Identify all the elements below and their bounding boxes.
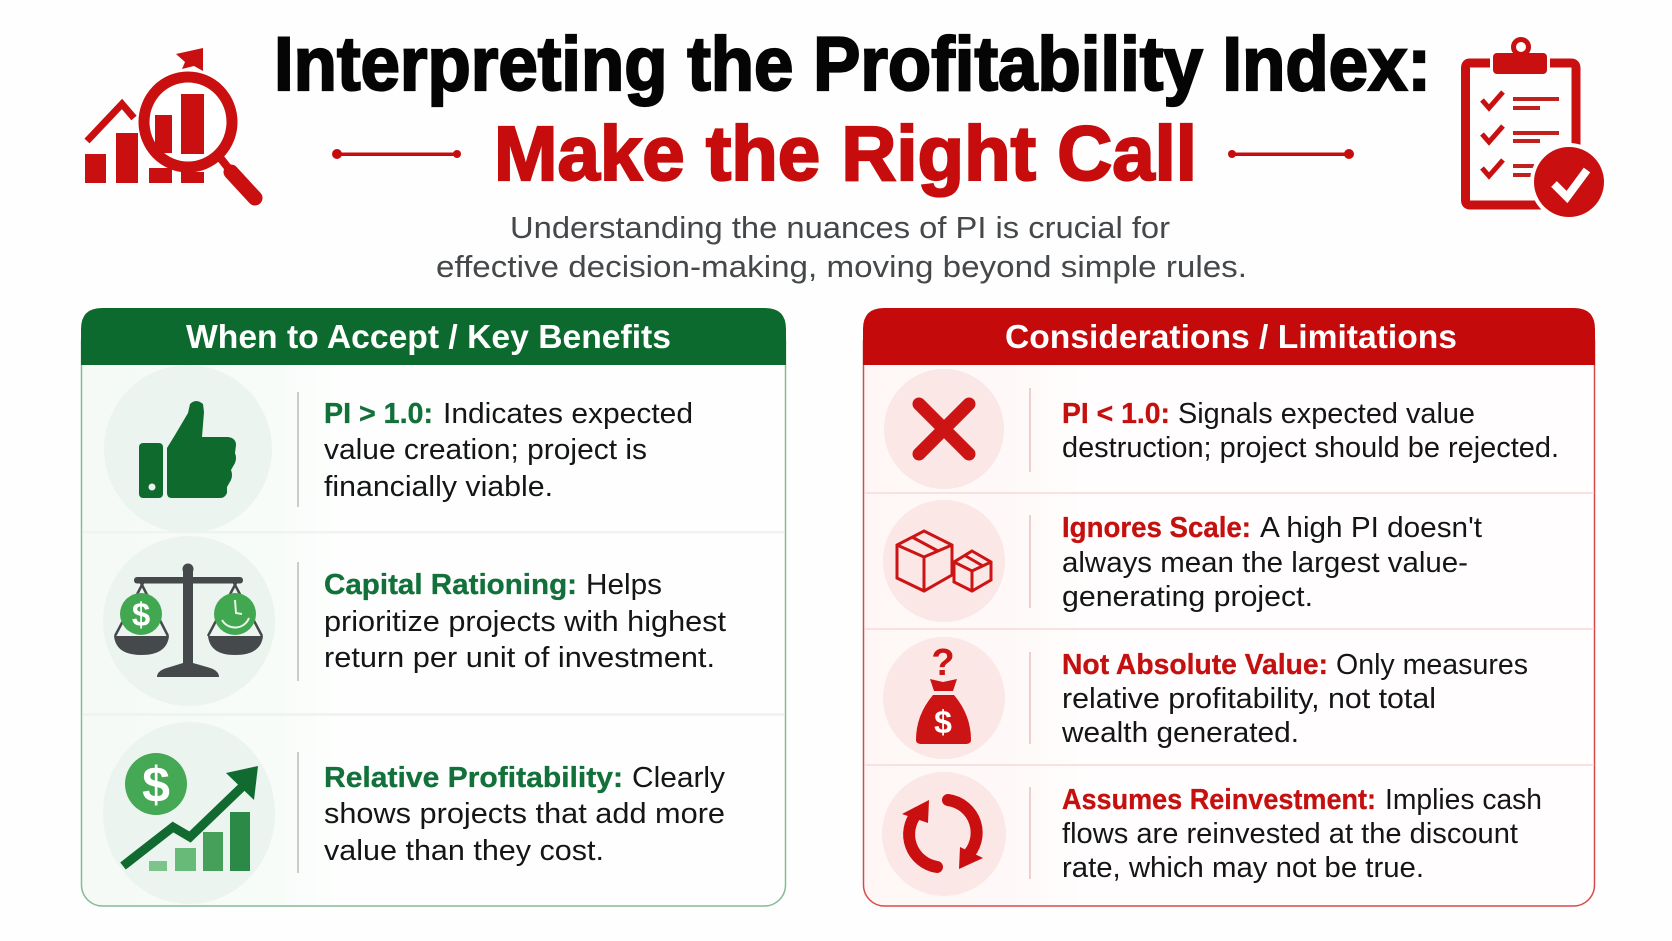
text: relative profitability: Relative Profitability: <box>324 762 623 794</box>
text: not absolute value: relative profitability, not total <box>1062 683 1436 715</box>
red panel header: Considerations / Limitations <box>1005 318 1457 355</box>
icon: two boxes <box>883 500 1005 622</box>
row: PI below 1.0 <box>884 369 1559 489</box>
text: assumes reinvestment: flows are reinvested at the discount <box>1062 818 1518 850</box>
text: PI below 1.0: PI < 1.0: <box>1062 398 1170 430</box>
green panel header <box>81 308 786 365</box>
text: capital rationing <box>324 569 726 674</box>
icon: balance scale: $ <box>132 596 150 633</box>
icon: circular arrows <box>882 772 1006 896</box>
text: PI below 1.0: Signals expected value <box>1178 398 1475 430</box>
text: PI above 1.0 <box>324 398 693 503</box>
text: not absolute value: wealth generated. <box>1061 717 1299 749</box>
red panel header <box>863 308 1595 365</box>
green panel header: When to Accept / Key Benefits <box>186 318 671 355</box>
text: capital rationing: Helps <box>586 569 662 601</box>
text: not absolute value: Only measures <box>1336 649 1528 681</box>
text: ignores scale: A high PI doesn't <box>1260 512 1482 544</box>
right title rule <box>1228 149 1354 159</box>
icon: dollar and rising chart: $ <box>142 757 170 813</box>
title line 2: Make the Right Call <box>494 111 1197 197</box>
panel: considerations / limitations <box>863 308 1595 906</box>
text: ignores scale: Ignores Scale: <box>1062 512 1251 544</box>
text: assumes reinvestment: Assumes Reinvestment: <box>1062 784 1376 816</box>
row: not absolute value <box>883 637 1528 759</box>
text: relative profitability: value than they cost. <box>324 835 604 867</box>
text: capital rationing: return per unit of investment. <box>324 642 715 674</box>
icon: clipboard checklist <box>1466 40 1608 221</box>
text: relative profitability <box>324 762 726 867</box>
text: PI above 1.0: value creation; project is <box>324 434 647 466</box>
row: ignores scale <box>883 500 1482 622</box>
icon: chart with magnifying glass <box>85 48 255 198</box>
icon: money bag with question mark <box>883 637 1005 759</box>
icon: dollar and rising chart <box>103 722 275 904</box>
icon: thumbs up <box>104 365 272 533</box>
text: PI below 1.0 <box>1062 398 1559 464</box>
text: ignores scale: generating project. <box>1062 581 1313 613</box>
text: ignores scale: always mean the largest value- <box>1062 547 1468 579</box>
text: capital rationing: prioritize projects with highest <box>324 606 726 638</box>
text: assumes reinvestment: rate, which may not be true. <box>1062 852 1424 884</box>
text: relative profitability: shows projects that add more <box>324 798 725 830</box>
text: assumes reinvestment <box>1062 784 1542 884</box>
title line 1: Interpreting the Profitability Index: <box>274 22 1431 107</box>
text: PI above 1.0: Indicates expected <box>443 398 693 430</box>
text: ignores scale <box>1062 512 1482 613</box>
text: not absolute value: Not Absolute Value: <box>1062 649 1328 681</box>
text: relative profitability: Clearly <box>632 762 726 794</box>
title <box>274 22 1431 197</box>
subtitle: Understanding the nuances of PI is crucial for <box>510 210 1170 245</box>
icon: money bag with question mark: ? <box>931 642 955 684</box>
subtitle <box>436 210 1247 284</box>
text: PI above 1.0: PI > 1.0: <box>324 398 433 430</box>
icon: balance scale <box>103 536 275 706</box>
row: PI above 1.0 <box>104 365 693 533</box>
row: relative profitability <box>103 722 726 904</box>
text: PI above 1.0: financially viable. <box>324 471 553 503</box>
text: capital rationing: Capital Rationing: <box>324 569 577 601</box>
icon: red cross <box>884 369 1004 489</box>
row: assumes reinvestment <box>882 772 1542 896</box>
text: PI below 1.0: destruction; project should be rejected. <box>1062 432 1559 464</box>
text: not absolute value <box>1061 649 1528 749</box>
subtitle: effective decision-making, moving beyond simple rules. <box>436 249 1247 284</box>
row: capital rationing <box>103 536 726 706</box>
icon: money bag with question mark: $ <box>934 704 952 740</box>
left title rule <box>332 149 461 159</box>
panel: when to accept / key benefits <box>81 308 786 906</box>
text: assumes reinvestment: Implies cash <box>1385 784 1542 816</box>
